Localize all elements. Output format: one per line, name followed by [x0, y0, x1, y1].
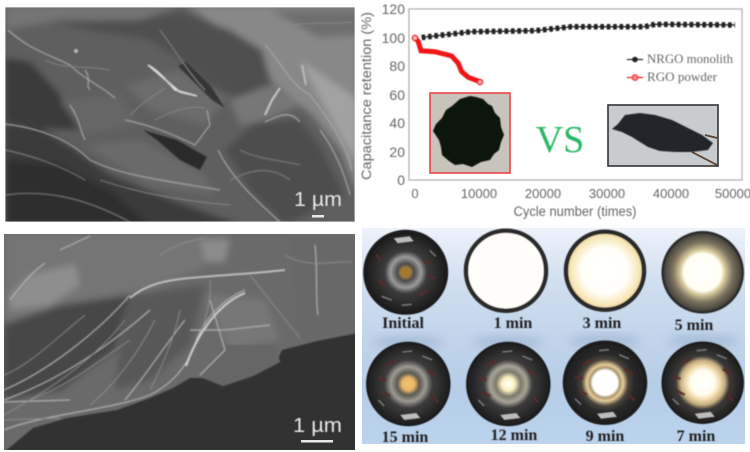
- series: NRGO monolith: [422, 24, 735, 38]
- soft shadows between rows: [372, 335, 739, 348]
- reactor: 1 min: [466, 231, 546, 332]
- scale label: bottom micrograph: 1 µm: [293, 415, 342, 437]
- reactor: 1 min: 1 min: [494, 315, 532, 332]
- reactor: 12 min: 12 min: [491, 427, 537, 444]
- x axis labels: 0: [411, 186, 419, 201]
- reactor: 15 min: [367, 342, 450, 446]
- x axis title: Cycle number (times): [514, 204, 636, 219]
- x axis labels: 40000: [653, 186, 689, 201]
- plot frame: [409, 9, 742, 180]
- reactor: 3 min: [566, 232, 644, 332]
- legend: NRGO monolith: [647, 52, 734, 66]
- y axis labels: [382, 1, 405, 188]
- chart: capacitance retention: [358, 1, 750, 219]
- inset photo: NRGO monolith: [608, 105, 718, 166]
- inset photo: RGO powder: [430, 93, 510, 173]
- panel: light-off time series: [362, 228, 745, 446]
- reactor: Initial: Initial: [382, 315, 424, 332]
- reactor: 9 min: 9 min: [586, 428, 624, 445]
- y axis title: Capacitance retention (%): [358, 12, 374, 180]
- x axis labels: 20000: [525, 186, 561, 201]
- y axis labels: 80: [389, 58, 405, 74]
- y axis labels: 20: [389, 144, 405, 160]
- series: RGO powder: [412, 36, 482, 84]
- x axis labels: 50000: [715, 186, 750, 201]
- x axis labels: [411, 186, 750, 201]
- y axis labels: 40: [389, 115, 405, 131]
- comparison label: VS: VS: [536, 119, 584, 161]
- reactor: 15 min: 15 min: [382, 429, 428, 446]
- reactor: 12 min: [467, 342, 550, 444]
- reactor: 7 min: 7 min: [677, 428, 715, 445]
- y axis labels: 120: [382, 1, 405, 17]
- scale label: top micrograph: 1 µm: [294, 189, 342, 211]
- SEM micrograph: top left: [5, 5, 358, 225]
- SEM micrograph: bottom left: [4, 234, 358, 452]
- y axis labels: 100: [382, 30, 405, 46]
- reactor: 5 min: [663, 232, 743, 334]
- y axis labels: 60: [389, 87, 405, 103]
- y axis labels: 0: [397, 172, 405, 188]
- reactor: 5 min: 5 min: [675, 317, 713, 334]
- x axis labels: 10000: [461, 186, 497, 201]
- reactor: 7 min: [662, 342, 743, 445]
- reactor: 3 min: 3 min: [583, 315, 621, 332]
- x axis labels: 30000: [589, 186, 625, 201]
- legend: RGO powder: [647, 70, 718, 84]
- reactor: 9 min: [564, 341, 646, 445]
- legend: [627, 52, 734, 84]
- reactor: Initial: [363, 230, 448, 332]
